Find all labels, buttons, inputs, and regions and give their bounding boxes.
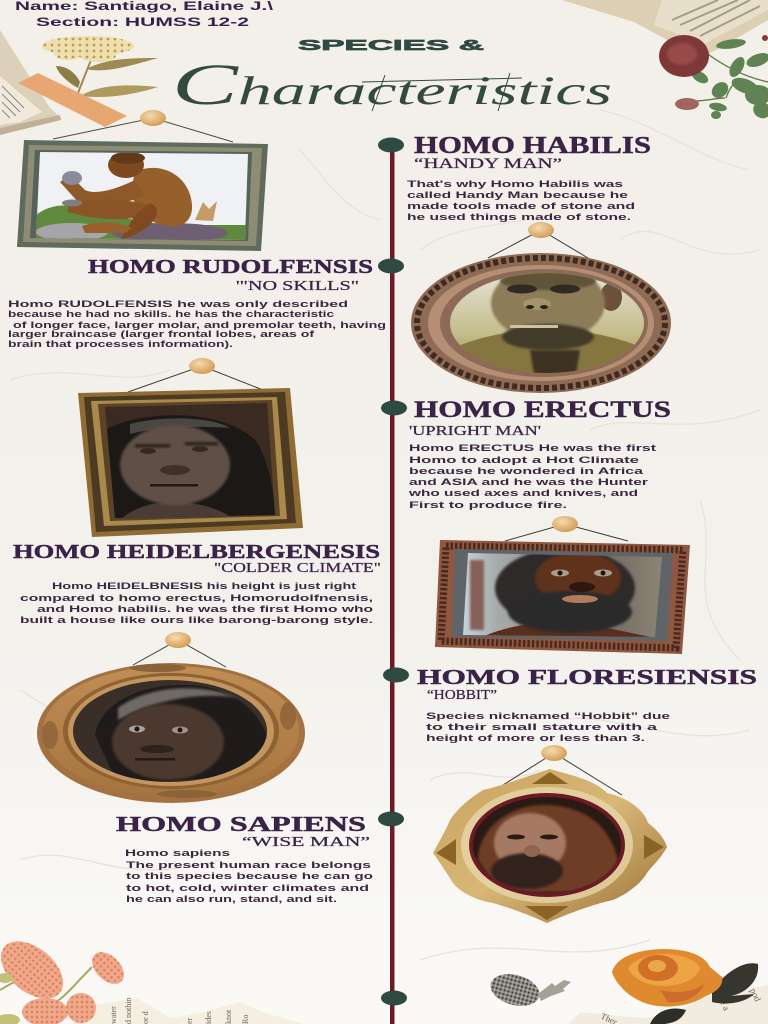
entry: Homo habilis: HOMO HABILIS — [414, 133, 651, 159]
portrait: Homo erectus in ornate rectangular frame — [435, 516, 690, 654]
entry: Homo floresiensis: to their small stature with a — [426, 721, 658, 732]
entry: Homo rudolfensis: brain that processes information). — [8, 338, 233, 349]
entry: Homo heidelbergenesis: and Homo habilis. he was the first Homo who — [37, 603, 373, 614]
decoration: bottom-left torn paper: Ro — [241, 1015, 250, 1024]
decoration: pressed yellow flower — [42, 36, 158, 97]
entry: Homo erectus: and ASIA and he was the Hunter — [409, 476, 649, 487]
entry: Homo habilis: he used things made of stone. — [407, 211, 631, 222]
entry: Homo sapiens: to this species because he can go — [126, 870, 373, 881]
decoration: salmon flowers — [0, 930, 130, 1024]
portrait: Homo sapiens in ornate gold frame — [433, 745, 667, 923]
portrait: seated Homo habilis in rectangular frame — [17, 110, 268, 251]
decoration: moth — [487, 969, 571, 1011]
entry: Homo erectus: First to produce fire. — [409, 499, 567, 510]
decoration: bottom-left torn paper: or d — [141, 1011, 150, 1024]
entry: Homo rudolfensis: of longer face, larger molar, and premolar teeth, having — [13, 319, 386, 330]
author name: Section: HUMSS 12-2 — [36, 15, 250, 29]
decoration: red rose and leaves — [659, 35, 768, 121]
entry: Homo erectus: HOMO ERECTUS — [414, 397, 671, 422]
decoration: bottom-left torn paper: er — [185, 1017, 194, 1024]
decoration: bottom-right torn paper — [568, 985, 768, 1024]
entry: Homo floresiensis: HOMO FLORESIENSIS — [417, 665, 757, 689]
decoration: orange tape — [18, 73, 127, 127]
portrait: Homo rudolfensis in oval frame — [411, 222, 671, 393]
decoration: orange rose — [612, 949, 758, 1024]
decoration: bottom-left torn paper: water — [109, 1006, 118, 1024]
entry: Homo sapiens: to hot, cold, winter climates and — [126, 882, 369, 893]
entry: Homo rudolfensis — [8, 256, 386, 349]
entry: Homo sapiens: “WISE MAN” — [242, 835, 370, 850]
entry: Homo floresiensis — [417, 665, 757, 743]
entry: Homo heidelbergenesis: Homo HEIDELBNESIS his height is just right — [52, 580, 356, 591]
decoration: top-left open book — [0, 30, 61, 135]
entry: Homo erectus: who used axes and knives, and — [407, 487, 638, 498]
entry: Homo rudolfensis: Homo RUDOLFENSIS he was only described — [8, 298, 348, 309]
entry: Homo erectus — [407, 397, 671, 510]
entry: Homo heidelbergenesis — [13, 541, 381, 625]
title: C haracteristics — [172, 52, 612, 117]
decoration: bottom-left torn paper — [73, 998, 304, 1024]
entry: Homo floresiensis: Species nicknamed “Hobbit” due — [426, 710, 670, 721]
entry: Homo heidelbergenesis: "COLDER CLIMATE" — [214, 561, 381, 576]
entry: Homo erectus: 'UPRIGHT MAN' — [409, 424, 541, 439]
entry: Homo erectus: Homo ERECTUS He was the first — [409, 442, 656, 453]
decoration: bottom-right torn paper: e a — [718, 999, 732, 1012]
entry: Homo floresiensis: height of more or less than 3. — [426, 732, 645, 743]
entry: Homo habilis: called Handy Man because he — [407, 189, 628, 200]
portrait: Homo heidelbergensis in wooden frame — [78, 358, 303, 537]
title — [172, 37, 612, 117]
portrait: Homo floresiensis in round gold frame — [37, 632, 305, 803]
author name — [15, 0, 274, 29]
entry: Homo rudolfensis: HOMO RUDOLFENSIS — [88, 256, 373, 278]
entry: Homo rudolfensis: '"NO SKILLS" — [236, 279, 359, 294]
entry: Homo sapiens: he can also run, stand, and sit. — [126, 893, 337, 904]
timeline — [378, 138, 409, 1024]
decoration: bottom-left torn paper: knot — [224, 1009, 233, 1024]
decoration: bottom-left torn paper: ides — [204, 1011, 213, 1024]
entry: Homo erectus: because he wondered in Africa — [409, 465, 644, 476]
entry: Homo habilis: “HANDY MAN” — [414, 156, 562, 172]
entry: Homo sapiens: HOMO SAPIENS — [116, 812, 366, 836]
entry: Homo sapiens: The present human race belongs — [126, 859, 371, 870]
entry: Homo rudolfensis: because he had no skills. he has the characteristic — [8, 308, 334, 319]
entry: Homo habilis: That's why Homo Habilis was — [407, 178, 623, 189]
entry: Homo sapiens — [116, 812, 373, 904]
decoration: bottom-right torn paper: pod — [748, 987, 763, 1004]
decoration: bottom-left torn paper: d nothin — [124, 998, 133, 1024]
entry: Homo erectus: Homo to adopt a Hot Climate — [409, 454, 639, 465]
entry: Homo sapiens: Homo sapiens — [125, 847, 230, 858]
entry: Homo heidelbergenesis: compared to homo erectus, Homorudolfnensis, — [20, 592, 373, 603]
entry: Homo habilis: made tools made of stone and — [407, 200, 635, 211]
entry: Homo heidelbergenesis: built a house like ours like barong-barong style. — [20, 614, 373, 625]
entry: Homo heidelbergenesis: HOMO HEIDELBERGENESIS — [13, 541, 380, 563]
entry: Homo habilis — [407, 133, 651, 222]
title: SPECIES & — [298, 37, 484, 54]
decoration: top-right book — [562, 0, 768, 58]
entry: Homo floresiensis: “HOBBIT” — [427, 688, 497, 703]
entry: Homo rudolfensis: larger braincase (larger frontal lobes, areas of — [8, 328, 315, 339]
